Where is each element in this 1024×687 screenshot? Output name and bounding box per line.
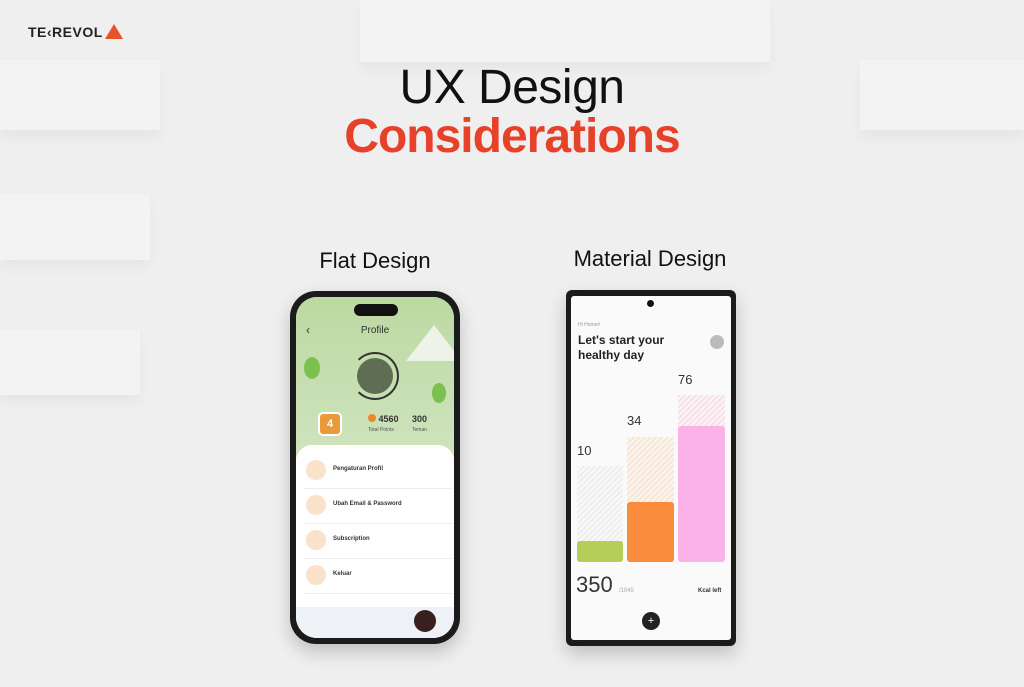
menu card: Pengaturan Profil bbox=[333, 466, 383, 472]
phone: flat design: Teman bbox=[412, 427, 427, 433]
phone: flat design: 4560 bbox=[378, 414, 399, 424]
phone: material design: Hi Homer! bbox=[578, 322, 601, 328]
phone: material design: 350 /1045 bbox=[576, 572, 634, 597]
menu card: Ubah Email & Password bbox=[333, 501, 402, 507]
menu card: Subscription bbox=[333, 536, 370, 542]
phone: flat design: ‹ bbox=[306, 323, 310, 337]
phone: material design bbox=[566, 290, 736, 646]
title bbox=[344, 61, 680, 163]
menu card: Keluar bbox=[333, 571, 352, 577]
bar chart: 76 bbox=[678, 372, 692, 387]
badge: 4 bbox=[327, 418, 333, 430]
bar chart: 34 bbox=[627, 413, 641, 428]
title: Considerations bbox=[344, 110, 680, 163]
phone: flat design bbox=[290, 291, 460, 644]
heading: material design: Material Design bbox=[574, 246, 726, 271]
phone: material design: Let's start your bbox=[578, 333, 664, 347]
phone: material design: healthy day bbox=[578, 348, 644, 362]
phone: flat design: Total Points bbox=[368, 427, 394, 433]
bar chart bbox=[577, 372, 725, 562]
menu card bbox=[296, 445, 454, 645]
title: UX Design bbox=[400, 61, 624, 114]
bottom nav bbox=[296, 607, 454, 638]
heading: flat design: Flat Design bbox=[319, 248, 431, 273]
phone: flat design: 300 bbox=[412, 414, 427, 424]
phone: flat design: Profile bbox=[361, 325, 389, 336]
green header bbox=[296, 297, 454, 457]
phone: material design: + bbox=[648, 615, 654, 627]
phone: material design: Kcal left bbox=[698, 588, 721, 594]
logo: TE‹REVOL bbox=[28, 24, 103, 40]
badge bbox=[318, 412, 342, 436]
bar chart: 10 bbox=[577, 443, 591, 458]
avatar bbox=[351, 352, 399, 400]
